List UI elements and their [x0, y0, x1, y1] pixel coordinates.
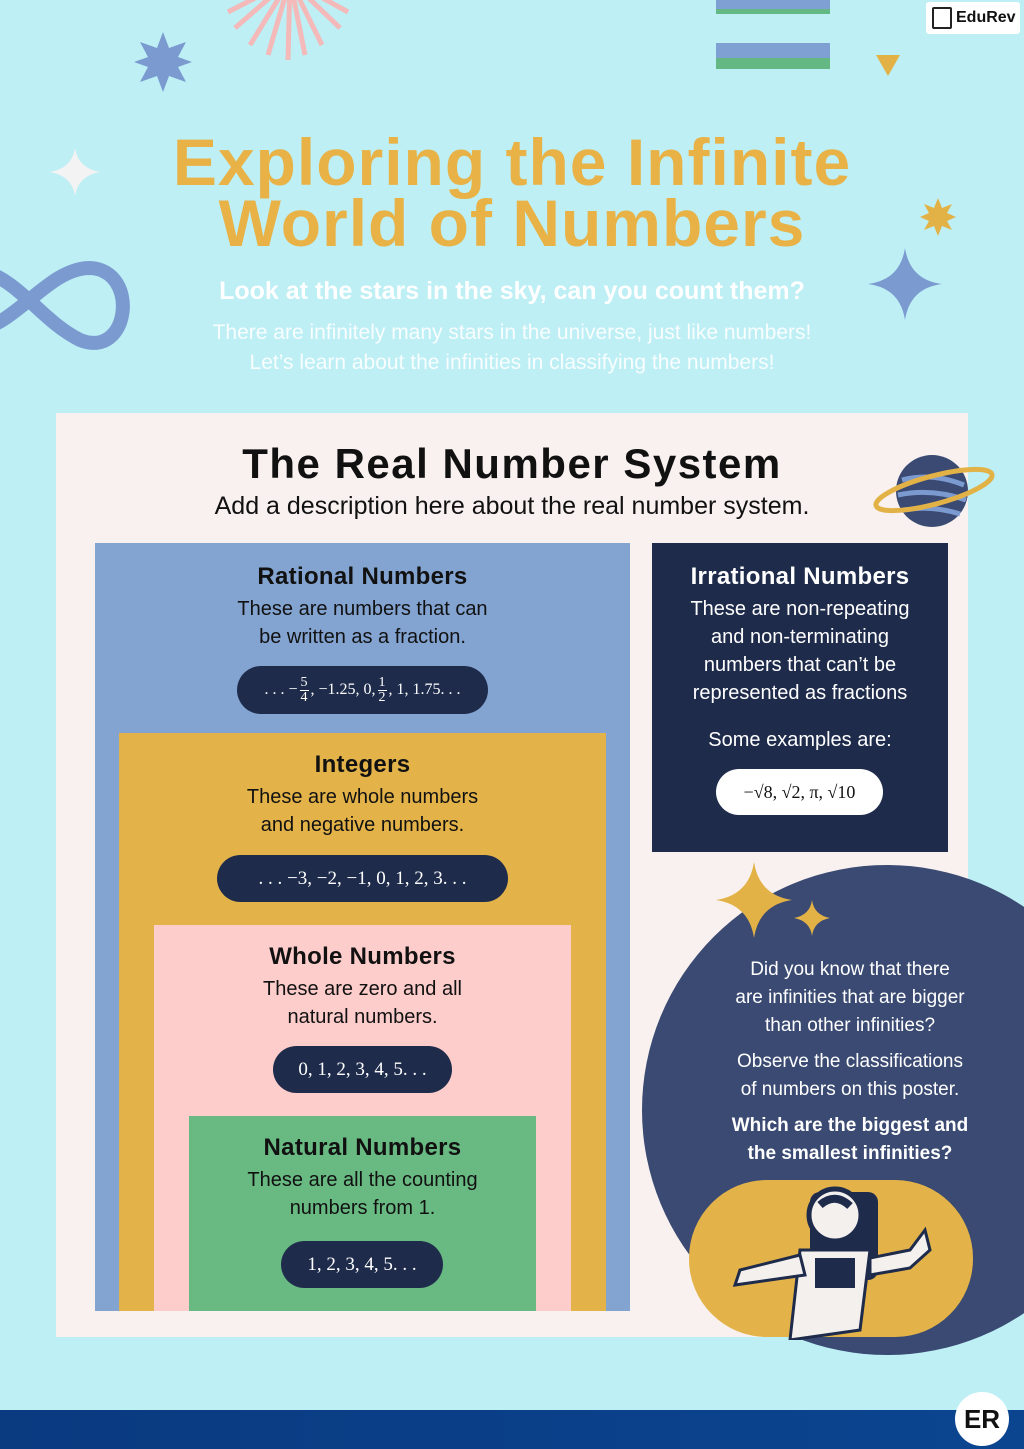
- callout text: Observe the classifications: [737, 1051, 963, 1072]
- pill: rational examples: [237, 666, 488, 714]
- panel: real number system: [56, 413, 968, 1337]
- pill: natural examples: [281, 1241, 443, 1288]
- box: irrational numbers: These are non-repeating: [690, 598, 910, 620]
- pill: rational examples: 5: [300, 674, 308, 690]
- pill: rational examples: 4: [300, 690, 308, 704]
- pill: irrational examples: [716, 769, 883, 815]
- box: irrational numbers: numbers that can’t be: [704, 654, 896, 676]
- icon: infinity: [0, 268, 123, 343]
- icon: gold sparkles: [716, 862, 830, 938]
- box: integers: and negative numbers.: [261, 814, 464, 836]
- box: natural numbers: Natural Numbers: [264, 1134, 461, 1161]
- icon: white sparkle: [50, 148, 100, 196]
- callout text: the smallest infinities?: [748, 1143, 952, 1164]
- title: World of Numbers: [219, 186, 805, 260]
- panel heading: The Real Number System: [242, 440, 782, 487]
- footer bar: [0, 1410, 1024, 1449]
- pill: rational examples: 1: [379, 674, 386, 690]
- box: irrational numbers: and non-terminating: [711, 626, 889, 648]
- box: whole numbers: [154, 925, 571, 1311]
- pill: natural examples: 1, 2, 3, 4, 5. . .: [307, 1254, 417, 1274]
- pill: integer examples: . . . −3, −2, −1, 0, 1, 2, 3. . .: [259, 868, 466, 888]
- box: natural numbers: [189, 1116, 536, 1311]
- box: integers: These are whole numbers: [247, 786, 478, 808]
- pill: whole examples: [273, 1046, 452, 1093]
- icon: blue star: [134, 32, 192, 92]
- pill: rational examples: 2: [379, 690, 386, 704]
- callout text: than other infinities?: [765, 1015, 935, 1036]
- icon: triangle: [876, 55, 900, 76]
- callout text: Did you know that there: [750, 959, 950, 980]
- box: whole numbers: Whole Numbers: [269, 943, 456, 970]
- box: natural numbers: These are all the counting: [247, 1169, 478, 1191]
- icon: astronaut: [732, 1186, 932, 1340]
- box: integers: Integers: [315, 751, 410, 778]
- icon: gold star: [920, 198, 956, 236]
- decorations: [0, 0, 956, 350]
- pill: rational examples: . . . − , −1.25, 0, , 1, 1.75. . .: [264, 681, 461, 698]
- logo: EduRev: [926, 2, 1020, 34]
- icon: blue sparkle: [868, 248, 942, 320]
- callout text: [732, 959, 968, 1164]
- box: whole numbers: natural numbers.: [287, 1006, 438, 1028]
- pill: irrational examples: −√8, √2, π, √10: [744, 782, 855, 802]
- subtitle: Look at the stars in the sky, can you count them?: [219, 277, 805, 305]
- box: rational numbers: [95, 543, 630, 1311]
- icon: pink burst: [228, 0, 348, 60]
- box: integers: [119, 733, 606, 1311]
- title: [173, 125, 851, 260]
- pill: whole examples: 0, 1, 2, 3, 4, 5. . .: [298, 1058, 427, 1080]
- box: natural numbers: numbers from 1.: [290, 1197, 435, 1219]
- box: rational numbers: Rational Numbers: [257, 563, 468, 590]
- circle callout background: [642, 865, 1024, 1355]
- icon: planet: [873, 455, 995, 527]
- panel description: Add a description here about the real number system.: [215, 492, 809, 520]
- pill: integer examples: [217, 855, 508, 902]
- callout text: are infinities that are bigger: [735, 987, 965, 1008]
- box: rational numbers: These are numbers that can: [237, 598, 488, 620]
- box: irrational numbers: Some examples are:: [708, 729, 892, 751]
- box: rational numbers: be written as a fraction.: [259, 626, 466, 648]
- box: irrational numbers: represented as fractions: [693, 682, 907, 704]
- callout text: of numbers on this poster.: [741, 1079, 959, 1100]
- box: irrational numbers: Irrational Numbers: [691, 563, 909, 590]
- yellow pill: [689, 1180, 973, 1337]
- logo: ER: ER: [964, 1404, 1000, 1434]
- logo: ER: [955, 1392, 1009, 1446]
- icon: stripes: [716, 0, 830, 14]
- box: whole numbers: These are zero and all: [263, 978, 462, 1000]
- box: irrational numbers: [652, 543, 948, 852]
- intro text: [213, 321, 811, 374]
- title: Exploring the Infinite: [173, 125, 851, 199]
- callout text: Which are the biggest and: [732, 1115, 968, 1136]
- intro text: Let’s learn about the infinities in classifying the numbers!: [250, 351, 774, 374]
- intro text: There are infinitely many stars in the universe, just like numbers!: [213, 321, 811, 344]
- logo: EduRev: EduRev: [956, 9, 1016, 26]
